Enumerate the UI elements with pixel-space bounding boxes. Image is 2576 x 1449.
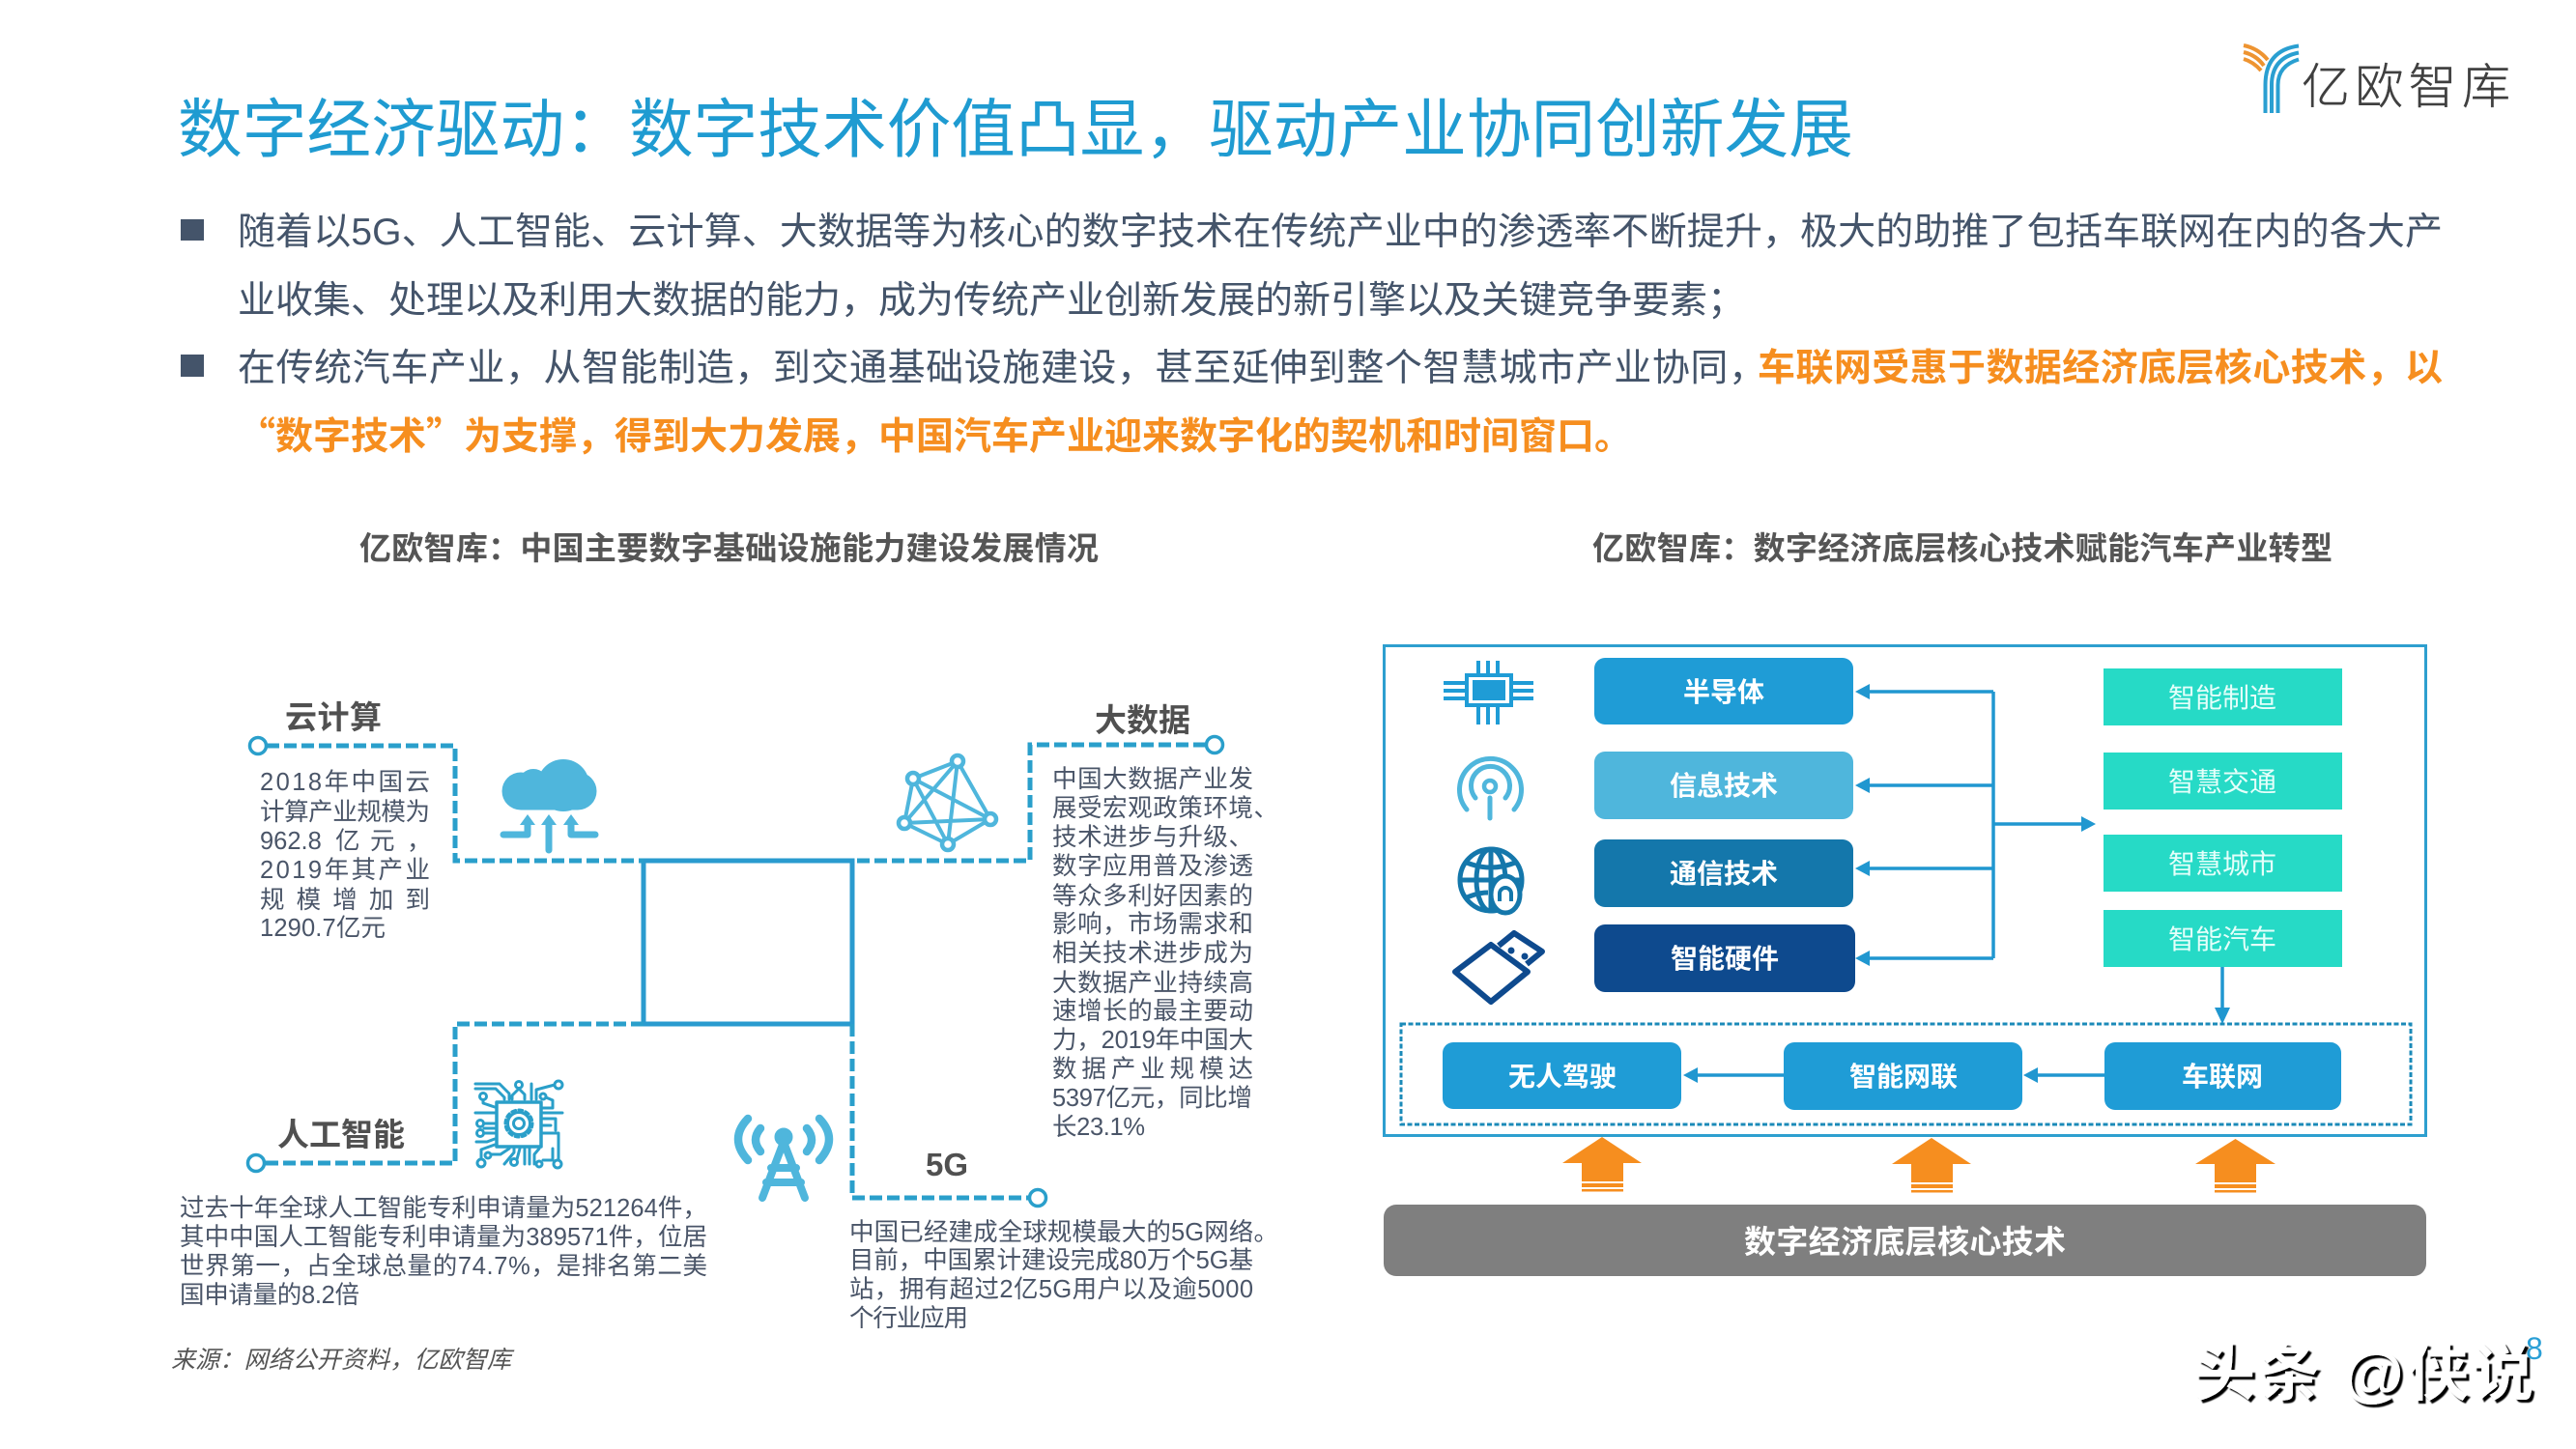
text block: cloud computing: 2018年中国云 (260, 769, 430, 796)
box: 通信技术: 通信技术 (1670, 859, 1778, 889)
box: 半导体 (1594, 658, 1853, 724)
text block: 5G: 个行业应用 (849, 1305, 968, 1332)
box: 智能硬件 (1594, 924, 1855, 992)
box: 智能制造: 智能制造 (2168, 683, 2276, 713)
box: 智慧交通: 智慧交通 (2168, 767, 2276, 797)
icon: network graph (899, 755, 996, 850)
connector: cloud computing (249, 738, 644, 861)
right chart title: 亿欧智库：数字经济底层核心技术赋能汽车产业转型 (1592, 530, 2333, 566)
icon: USB key (1455, 933, 1542, 1002)
text block: cloud computing: 962.8 (260, 828, 322, 855)
icon: cloud upload (502, 759, 597, 850)
heading: 人工智能: 人工智能 (277, 1117, 405, 1152)
bullet 2 marker (181, 355, 204, 377)
watermark: 头条 @侠说 (2193, 1339, 2533, 1408)
heading: 大数据: 大数据 (1095, 702, 1190, 738)
text block: 5G: 站，拥有超过2亿5G用户以及逾5000 (849, 1276, 1253, 1303)
box: 无人驾驶: 无人驾驶 (1508, 1062, 1617, 1092)
central connector square (644, 861, 852, 1024)
bar: core technology base (1384, 1205, 2426, 1276)
icon: AI chip (475, 1081, 562, 1168)
arrows: connector tree (1855, 684, 2096, 966)
text block: big data: 影响，市场需求和 (1052, 911, 1253, 938)
text block: cloud computing: ， (407, 828, 432, 855)
box: 智慧交通 (2104, 753, 2342, 810)
text block: AI (180, 1195, 707, 1309)
outer frame (1384, 645, 2425, 1136)
text block: 5G: 目前，中国累计建设完成80万个5G基 (849, 1247, 1253, 1274)
box: 智能网联 (1784, 1042, 2022, 1110)
connector: big data (852, 736, 1223, 861)
text block: AI: 过去十年全球人工智能专利申请量为521264件， (180, 1195, 707, 1222)
icon: signal (1459, 758, 1521, 818)
box: 无人驾驶 (1443, 1042, 1681, 1109)
arrows: between boxes (1683, 1067, 2104, 1083)
text block: big data: 数字应用普及渗透 (1052, 853, 1253, 880)
logo: 亿欧智库 (2244, 45, 2510, 114)
text block: big data: 长23.1% (1052, 1114, 1145, 1141)
text block: cloud computing: 元 (370, 828, 395, 855)
text block: AI: 世界第一，占全球总量的74.7%，是排名第二美 (180, 1253, 707, 1280)
text block: big data: 速增长的最主要动 (1052, 998, 1253, 1025)
icon: Y logo (2244, 45, 2299, 113)
bar: core technology base: 数字经济底层核心技术 (1744, 1224, 2066, 1260)
bullet 2 highlight line 2: “数字技术”为支撑，得到大力发展，中国汽车产业迎来数字化的契机和时间窗口。 (238, 407, 1632, 461)
arrow: orange up 1 (1562, 1137, 1642, 1192)
connector: AI (247, 1024, 644, 1171)
box: 半导体: 半导体 (1683, 677, 1764, 707)
box: 智能制造 (2104, 668, 2342, 725)
bullet 1 line 2: 业收集、处理以及利用大数据的能力，成为传统产业创新发展的新引擎以及关键竞争要素； (238, 280, 1745, 322)
text block: big data: 数 据 产 业 规 模 达 (1052, 1056, 1253, 1083)
icon: globe (1460, 849, 1522, 913)
text block: big data: 等众多利好因素的 (1052, 883, 1253, 910)
text block: cloud computing: 计算产业规模为 (260, 799, 430, 826)
box: 通信技术 (1594, 839, 1853, 907)
text block: AI: 其中中国人工智能专利申请量为389571件，位居 (180, 1224, 707, 1251)
text block: big data: 展受宏观政策环境、 (1052, 795, 1278, 822)
bullet 1 marker (181, 219, 204, 241)
bullet 2 line 1: 在传统汽车产业，从智能制造，到交通基础设施建设，甚至延伸到整个智慧城市产业协同， (238, 348, 1766, 389)
text block: cloud computing (260, 769, 432, 942)
title: 数字经济驱动：数字技术价值凸显，驱动产业协同创新发展 (178, 95, 1853, 166)
text block: cloud computing: 1290.7亿元 (260, 915, 386, 942)
text block: cloud computing: 规 模 增 加 到 (260, 887, 430, 914)
text block: big data: 技术进步与升级、 (1052, 824, 1253, 851)
box: 信息技术 (1594, 752, 1853, 819)
box: 智慧城市: 智慧城市 (2168, 849, 2276, 879)
box: 智能汽车: 智能汽车 (2168, 924, 2276, 954)
left chart title: 亿欧智库：中国主要数字基础设施能力建设发展情况 (359, 530, 1099, 566)
icon: 5G antenna (738, 1119, 829, 1198)
text block: 5G (849, 1219, 1278, 1332)
page number: 8 (2526, 1331, 2543, 1366)
text block: big data: 5397亿元，同比增 (1052, 1085, 1252, 1112)
icon: chip (1444, 661, 1533, 724)
box: 车联网: 车联网 (2182, 1062, 2263, 1092)
bullet list (181, 212, 2443, 461)
logo wordmark: 亿欧智库 (2302, 60, 2510, 114)
dashed group frame (1401, 1024, 2411, 1124)
connector: 5G (852, 1024, 1045, 1206)
text block: cloud computing: 亿 (335, 828, 360, 855)
text block: big data: 相关技术进步成为 (1052, 940, 1253, 967)
box: 车联网 (2104, 1042, 2341, 1110)
text block: big data: 大数据产业持续高 (1052, 970, 1253, 997)
panel: core tech empowering auto industry (1384, 645, 2425, 1136)
arrow: orange up 2 (1892, 1138, 1971, 1192)
box: 智能汽车 (2104, 910, 2342, 967)
text block: cloud computing: 2019年其产业 (260, 857, 430, 884)
text block: 5G: 中国已经建成全球规模最大的5G网络。 (849, 1219, 1278, 1246)
box: 信息技术: 信息技术 (1670, 771, 1778, 801)
arrow: orange up 3 (2195, 1139, 2275, 1192)
heading: 5G: 5G (926, 1147, 968, 1182)
bullet 2 highlight: 车联网受惠于数据经济底层核心技术，以 (1758, 348, 2443, 389)
text block: big data (1052, 766, 1278, 1141)
panel: digital infrastructure diagram (180, 699, 1278, 1332)
source note: 来源：网络公开资料，亿欧智库 (171, 1347, 515, 1374)
box: 智能网联: 智能网联 (1849, 1062, 1958, 1092)
box: 智能硬件: 智能硬件 (1671, 944, 1779, 974)
text block: big data: 力，2019年中国大 (1052, 1027, 1253, 1054)
text block: big data: 中国大数据产业发 (1052, 766, 1253, 793)
heading: 云计算: 云计算 (285, 699, 382, 735)
bullet 1 line 1: 随着以5G、人工智能、云计算、大数据等为核心的数字技术在传统产业中的渗透率不断提升，极大的助推了包括车联网在内的各大产 (238, 212, 2443, 253)
text block: AI: 国申请量的8.2倍 (180, 1282, 359, 1309)
box: 智慧城市 (2104, 835, 2342, 892)
arrow: down to 车联网 group (2215, 967, 2230, 1024)
